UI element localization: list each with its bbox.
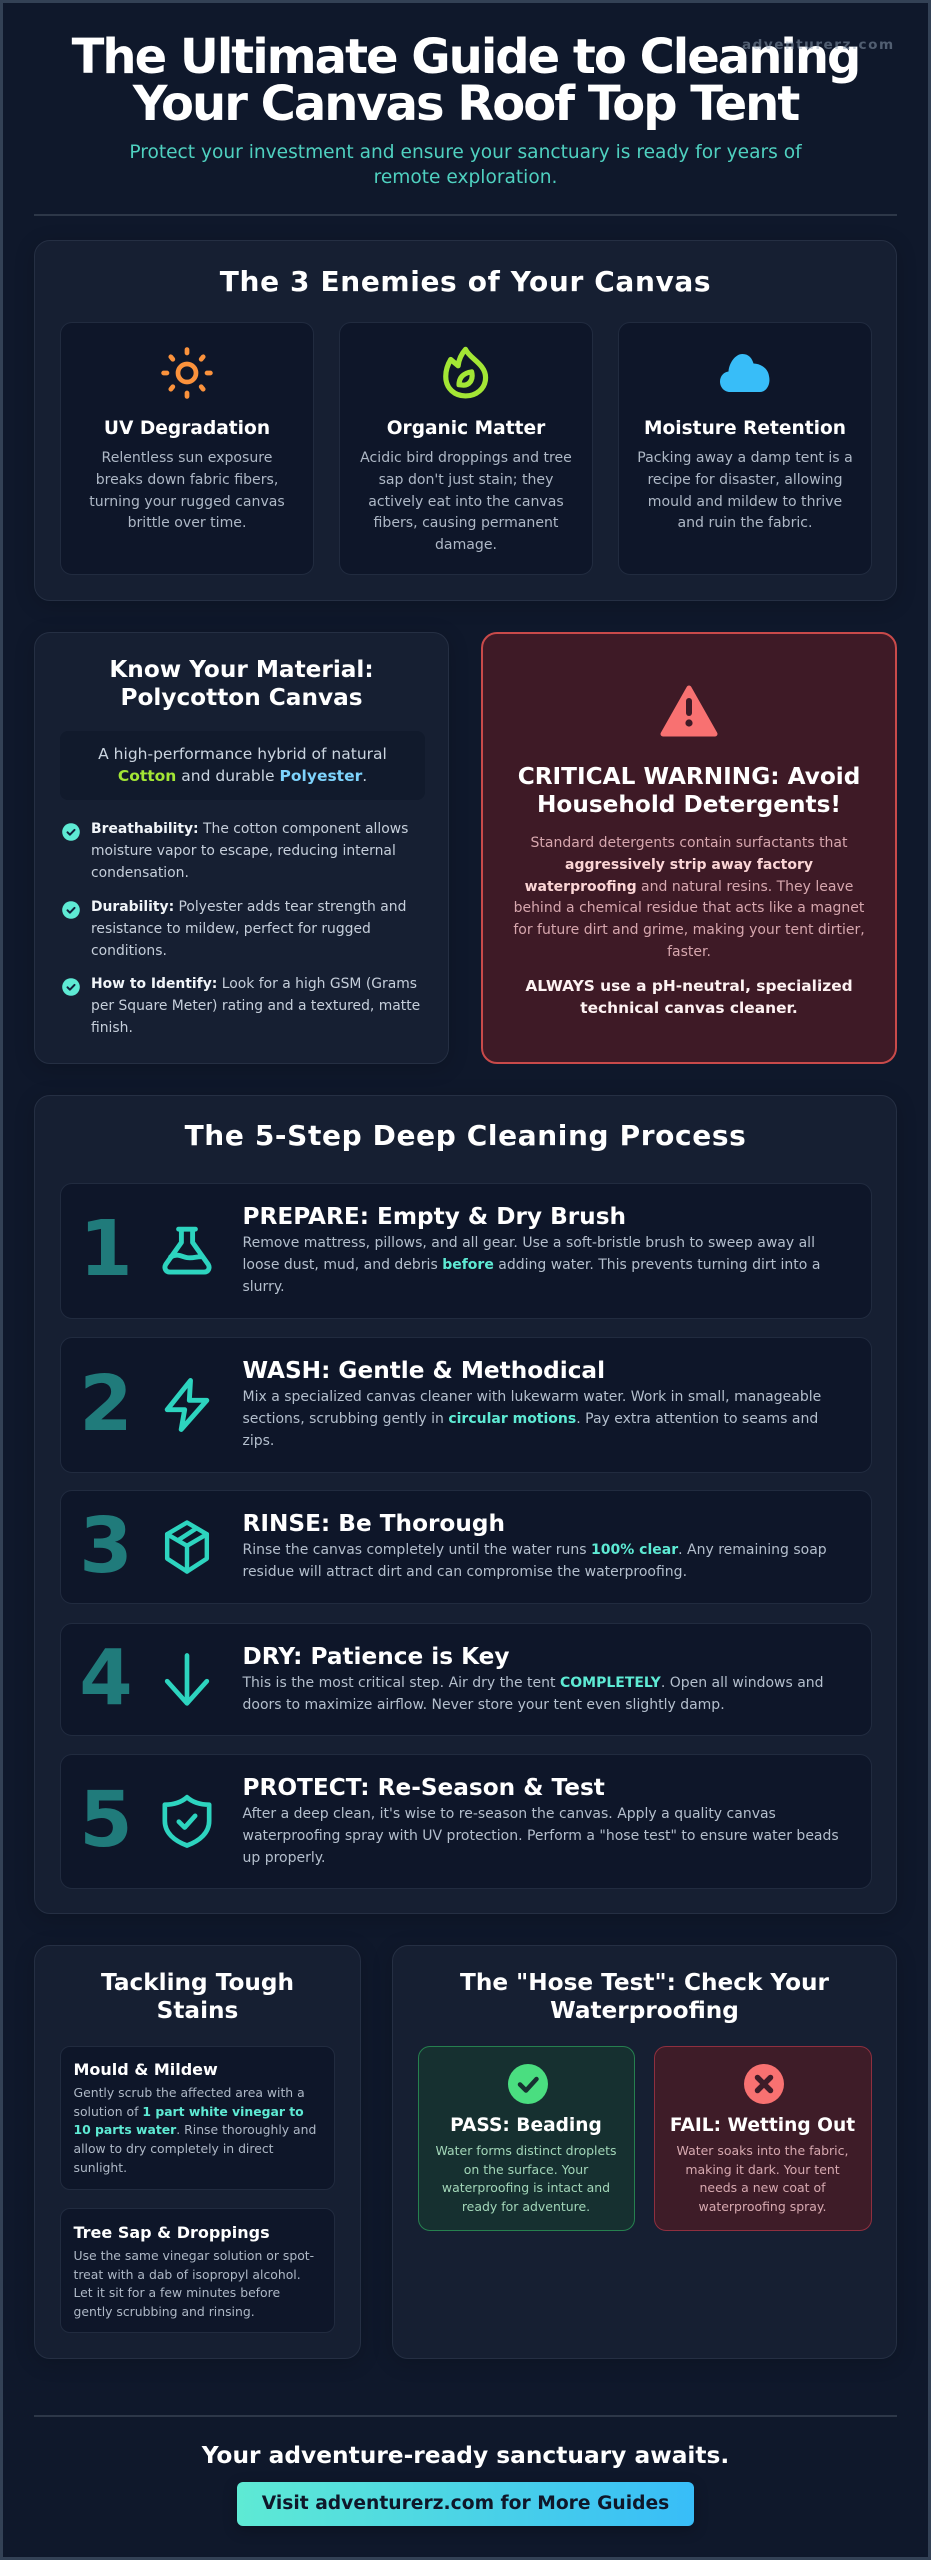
card text: treat with a dab of isopropyl alcohol. xyxy=(74,2267,301,2282)
list text: Breathability: The cotton component allows xyxy=(91,821,408,837)
panel: know your material xyxy=(34,632,449,1064)
fail title: FAIL: Wetting Out xyxy=(670,2115,855,2136)
icon: fail cross xyxy=(744,2064,784,2104)
icon: shield check xyxy=(162,1794,212,1848)
card: tree sap and droppings xyxy=(60,2208,335,2333)
card title: UV Degradation xyxy=(104,418,270,439)
title xyxy=(72,29,859,132)
card text: Acidic bird droppings and tree xyxy=(360,450,572,466)
pass text: waterproofing is intact and xyxy=(442,2180,610,2195)
card: UV degradation xyxy=(60,322,314,575)
step text: Mix a specialized canvas cleaner with lukewarm water. Work in small, manageable xyxy=(242,1389,821,1405)
title: The Ultimate Guide to Cleaning xyxy=(72,29,859,85)
call to action button: Visit adventurerz.com for More Guides xyxy=(262,2493,669,2514)
panel: 3 enemies xyxy=(34,240,897,601)
step text xyxy=(242,1806,839,1866)
icon: check xyxy=(62,978,80,996)
step number: 2 xyxy=(79,1360,133,1449)
card text xyxy=(360,450,572,553)
list text: finish. xyxy=(91,1020,133,1036)
step text: This is the most critical step. Air dry the tent COMPLETELY. Open all windows and xyxy=(242,1675,824,1691)
card title: Mould & Mildew xyxy=(74,2060,218,2079)
fail text: making it dark. Your tent xyxy=(685,2162,840,2177)
step number: 4 xyxy=(79,1634,133,1723)
card: organic matter xyxy=(339,322,593,575)
card text: sap don't just stain; they xyxy=(379,472,553,488)
warning advice xyxy=(525,977,853,1017)
heading: material xyxy=(109,656,374,711)
watermark: adventurerz.com xyxy=(742,37,895,53)
step text: loose dust, mud, and debris before adding water. This prevents turning dirt into a xyxy=(242,1257,820,1273)
card text xyxy=(74,2085,316,2175)
list item: breathability xyxy=(62,821,408,881)
callout: hybrid description: A high-performance hybrid of natural xyxy=(98,745,387,763)
warning text: aggressively strip away factory xyxy=(565,857,813,873)
subtitle: remote exploration. xyxy=(374,167,557,188)
warning text: Standard detergents contain surfactants that xyxy=(530,835,848,851)
card text: sunlight. xyxy=(74,2160,127,2175)
card text xyxy=(74,2248,314,2319)
panel: hose test xyxy=(392,1945,897,2359)
step text: Rinse the canvas completely until the water runs 100% clear. Any remaining soap xyxy=(242,1542,827,1558)
warning text: behind a chemical residue that acts like a magnet xyxy=(514,900,864,916)
card text: actively eat into the canvas xyxy=(368,494,564,510)
list item: how to identify xyxy=(62,976,420,1036)
step 5 xyxy=(60,1754,872,1889)
card text: solution of 1 part white vinegar to xyxy=(74,2104,304,2119)
pass title: PASS: Beading xyxy=(450,2115,602,2136)
heading: material: Know Your Material: xyxy=(109,656,374,683)
fail text: needs a new coat of xyxy=(700,2180,825,2195)
step text: zips. xyxy=(242,1433,274,1449)
icon: check xyxy=(62,823,80,841)
step title: WASH: Gentle & Methodical xyxy=(242,1356,605,1384)
card text: Packing away a damp tent is a xyxy=(637,450,853,466)
card text: allow to dry completely in direct xyxy=(74,2141,274,2156)
heading: hose test: The "Hose Test": Check Your xyxy=(460,1969,829,1996)
heading: hose test: Waterproofing xyxy=(550,1997,739,2024)
icon: box xyxy=(164,1520,210,1574)
card text: turning your rugged canvas xyxy=(89,494,285,510)
card text: Let it sit for a few minutes before xyxy=(74,2285,280,2300)
fail text: waterproofing spray. xyxy=(699,2199,826,2214)
step 1 xyxy=(60,1183,872,1319)
step 3 xyxy=(60,1490,872,1604)
heading: stains: Tackling Tough xyxy=(101,1969,294,1996)
icon: flame xyxy=(443,346,488,398)
list text: Durability: Polyester adds tear strength and xyxy=(91,899,406,915)
card text: mould and mildew to thrive xyxy=(648,494,842,510)
list text: condensation. xyxy=(91,865,189,881)
step title: PREPARE: Empty & Dry Brush xyxy=(242,1202,626,1230)
list text: resistance to mildew, perfect for rugged xyxy=(91,921,371,937)
list text xyxy=(91,899,406,959)
warning text: waterproofing and natural resins. They leave xyxy=(525,879,853,895)
card text: and ruin the fabric. xyxy=(678,515,812,531)
step text: residue will attract dirt and can compromise the waterproofing. xyxy=(242,1564,687,1580)
icon: warning triangle xyxy=(660,686,718,736)
pass text: ready for adventure. xyxy=(462,2199,590,2214)
panel: 5-step process xyxy=(34,1095,897,1914)
step text: doors to maximize airflow. Never store your tent even slightly damp. xyxy=(242,1697,725,1713)
step number: 3 xyxy=(79,1502,133,1591)
card text: Gently scrub the affected area with a xyxy=(74,2085,305,2100)
list text xyxy=(91,976,420,1036)
icon: sun xyxy=(161,347,213,399)
callout: hybrid description: Cotton and durable Polyester. xyxy=(118,767,367,785)
heading: stains: Stains xyxy=(157,1997,238,2024)
step 2 xyxy=(60,1337,872,1473)
fail text: Water soaks into the fabric, xyxy=(677,2143,848,2158)
step text: After a deep clean, it's wise to re-season the canvas. Apply a quality canvas xyxy=(242,1806,776,1822)
card text xyxy=(89,450,285,531)
icon: pass check xyxy=(508,2064,548,2104)
call to action button xyxy=(237,2482,694,2526)
list item: durability xyxy=(62,899,406,959)
step title: RINSE: Be Thorough xyxy=(242,1510,505,1536)
icon: check xyxy=(62,901,80,919)
panel: critical warning xyxy=(481,632,897,1064)
step text xyxy=(242,1235,820,1295)
warning text: for future dirt and grime, making your tent dirtier, xyxy=(513,922,865,938)
step title: DRY: Patience is Key xyxy=(242,1642,510,1670)
heading: enemies: The 3 Enemies of Your Canvas xyxy=(220,265,711,298)
card text: Relentless sun exposure xyxy=(102,450,272,466)
card: pass xyxy=(418,2046,635,2231)
heading: hose test xyxy=(460,1969,829,2024)
card title: Moisture Retention xyxy=(644,418,846,439)
warning advice: ALWAYS use a pH-neutral, specialized xyxy=(525,977,853,995)
list text: How to Identify: Look for a high GSM (Grams xyxy=(91,976,417,992)
warning text: faster. xyxy=(667,944,711,960)
pass text xyxy=(435,2143,617,2214)
panel: tough stains xyxy=(34,1945,361,2359)
footer tagline: Your adventure-ready sanctuary awaits. xyxy=(202,2442,729,2469)
card text: 10 parts water. Rinse thoroughly and xyxy=(74,2122,316,2137)
warning advice: technical canvas cleaner. xyxy=(580,999,798,1017)
card text: gently scrubbing and rinsing. xyxy=(74,2304,255,2319)
card: moisture retention xyxy=(618,322,872,575)
icon: arrow down xyxy=(164,1653,210,1706)
card title: Tree Sap & Droppings xyxy=(74,2223,270,2242)
list text: per Square Meter) rating and a textured, matte xyxy=(91,998,420,1014)
card text: Use the same vinegar solution or spot- xyxy=(74,2248,314,2263)
warning heading: CRITICAL WARNING: Avoid xyxy=(518,763,860,790)
step text: up properly. xyxy=(242,1850,326,1866)
step text: Remove mattress, pillows, and all gear. Use a soft-bristle brush to sweep away all xyxy=(242,1235,815,1251)
list text: conditions. xyxy=(91,943,167,959)
warning heading: Household Detergents! xyxy=(537,791,841,818)
icon: cloud xyxy=(720,354,770,392)
heading: process: The 5-Step Deep Cleaning Process xyxy=(185,1119,746,1152)
card text: brittle over time. xyxy=(128,515,246,531)
card text: breaks down fabric fibers, xyxy=(96,472,278,488)
list text xyxy=(91,821,408,881)
step text xyxy=(242,1389,821,1449)
list text: moisture vapor to escape, reducing internal xyxy=(91,843,396,859)
step text: slurry. xyxy=(242,1279,285,1295)
warning text xyxy=(513,835,865,960)
step text xyxy=(242,1675,824,1713)
card: fail xyxy=(654,2046,872,2231)
icon: lightning bolt xyxy=(164,1378,210,1432)
pass text: Water forms distinct droplets xyxy=(435,2143,617,2158)
step 4 xyxy=(60,1623,872,1736)
icon: flask xyxy=(162,1226,212,1274)
heading: material: Polycotton Canvas xyxy=(120,684,363,711)
heading: stains xyxy=(101,1969,294,2024)
card text: damage. xyxy=(435,537,497,553)
card: mould and mildew xyxy=(60,2046,335,2190)
fail text xyxy=(677,2143,848,2214)
step number: 1 xyxy=(79,1205,133,1294)
subtitle: Protect your investment and ensure your sanctuary is ready for years of xyxy=(129,142,802,163)
warning heading xyxy=(518,763,860,818)
card text: fibers, causing permanent xyxy=(374,515,558,531)
step text xyxy=(242,1542,827,1580)
subtitle xyxy=(129,142,802,188)
step text: sections, scrubbing gently in circular motions. Pay extra attention to seams and xyxy=(242,1411,818,1427)
card text: recipe for disaster, allowing xyxy=(647,472,843,488)
title: Your Canvas Roof Top Tent xyxy=(133,76,798,132)
step text: waterproofing spray with UV protection. Perform a "hose test" to ensure water beads xyxy=(242,1828,839,1844)
pass text: on the surface. Your xyxy=(464,2162,588,2177)
step number: 5 xyxy=(79,1776,133,1865)
callout: hybrid description xyxy=(60,731,425,800)
step title: PROTECT: Re-Season & Test xyxy=(242,1774,605,1800)
card text xyxy=(637,450,853,531)
card title: Organic Matter xyxy=(387,418,545,439)
